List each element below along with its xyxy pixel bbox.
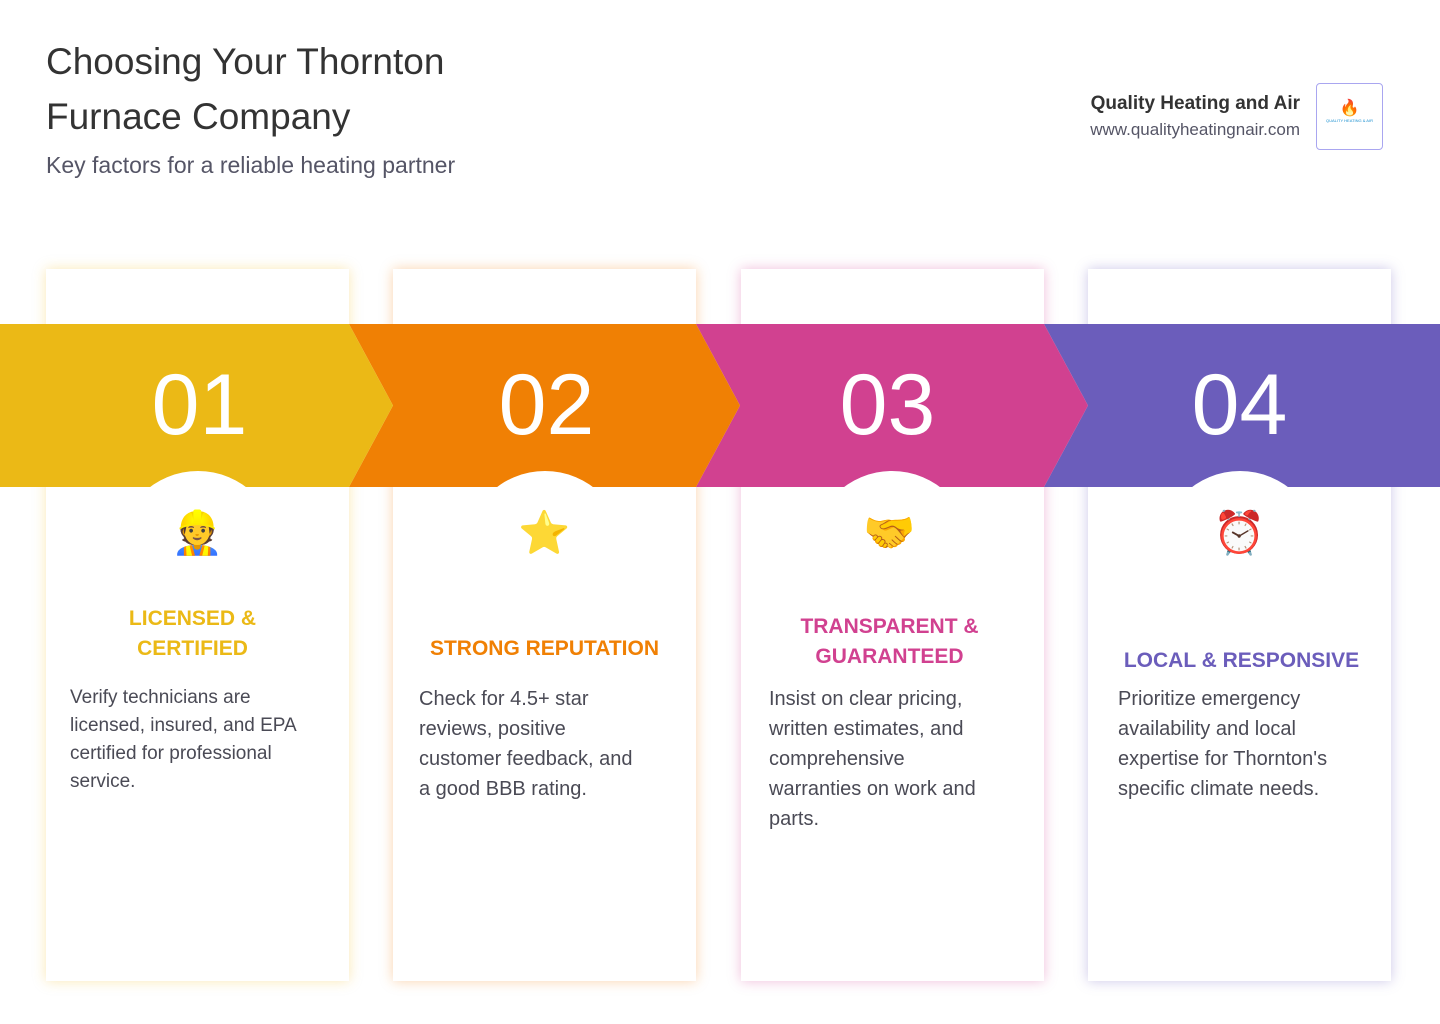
brand block: Quality Heating and Air xyxy=(1091,93,1300,114)
title: Choosing Your Thornton xyxy=(46,41,444,82)
logo xyxy=(1316,83,1383,150)
text: 03 xyxy=(840,357,935,453)
numbers: 01 xyxy=(152,357,247,453)
text: Check for 4.5+ star reviews, positive customer feedback, and a good BBB rating. xyxy=(419,688,632,800)
text: Insist on clear pricing, written estimates, and comprehensive warranties on work and parts. xyxy=(769,688,976,830)
subtitle: Key factors for a reliable heating partner xyxy=(46,152,455,178)
brand block: www.qualityheatingnair.com xyxy=(1090,120,1300,139)
card 4 xyxy=(1088,269,1391,981)
logo: QUALITY HEATING & AIR xyxy=(1326,118,1373,123)
titles: CERTIFIED xyxy=(137,637,248,660)
titles: LICENSED & xyxy=(129,607,256,630)
text: 02 xyxy=(499,357,594,453)
card 1 xyxy=(46,269,349,981)
text: LOCAL & RESPONSIVE xyxy=(1124,649,1359,672)
title xyxy=(46,41,444,137)
text: TRANSPARENT & xyxy=(800,615,979,638)
titles xyxy=(129,607,256,660)
text: STRONG REPUTATION xyxy=(430,637,659,660)
text: Prioritize emergency availability and local expertise for Thornton's specific climate needs. xyxy=(1118,688,1327,800)
text: ⏰ xyxy=(1213,509,1266,556)
logo: 🔥 xyxy=(1340,100,1359,117)
card 2 xyxy=(393,269,696,981)
card 3 xyxy=(741,269,1044,981)
circles xyxy=(118,471,278,631)
icons: 👷 xyxy=(171,509,224,556)
text: ⭐ xyxy=(518,509,571,556)
brand block xyxy=(1090,93,1300,139)
text: 04 xyxy=(1192,357,1287,453)
body texts: Verify technicians are licensed, insured, and EPA certified for professional service. xyxy=(70,687,296,792)
text: GUARANTEED xyxy=(815,645,964,668)
text: 🤝 xyxy=(863,509,916,556)
title: Furnace Company xyxy=(46,96,350,137)
arrow band xyxy=(0,324,1440,487)
